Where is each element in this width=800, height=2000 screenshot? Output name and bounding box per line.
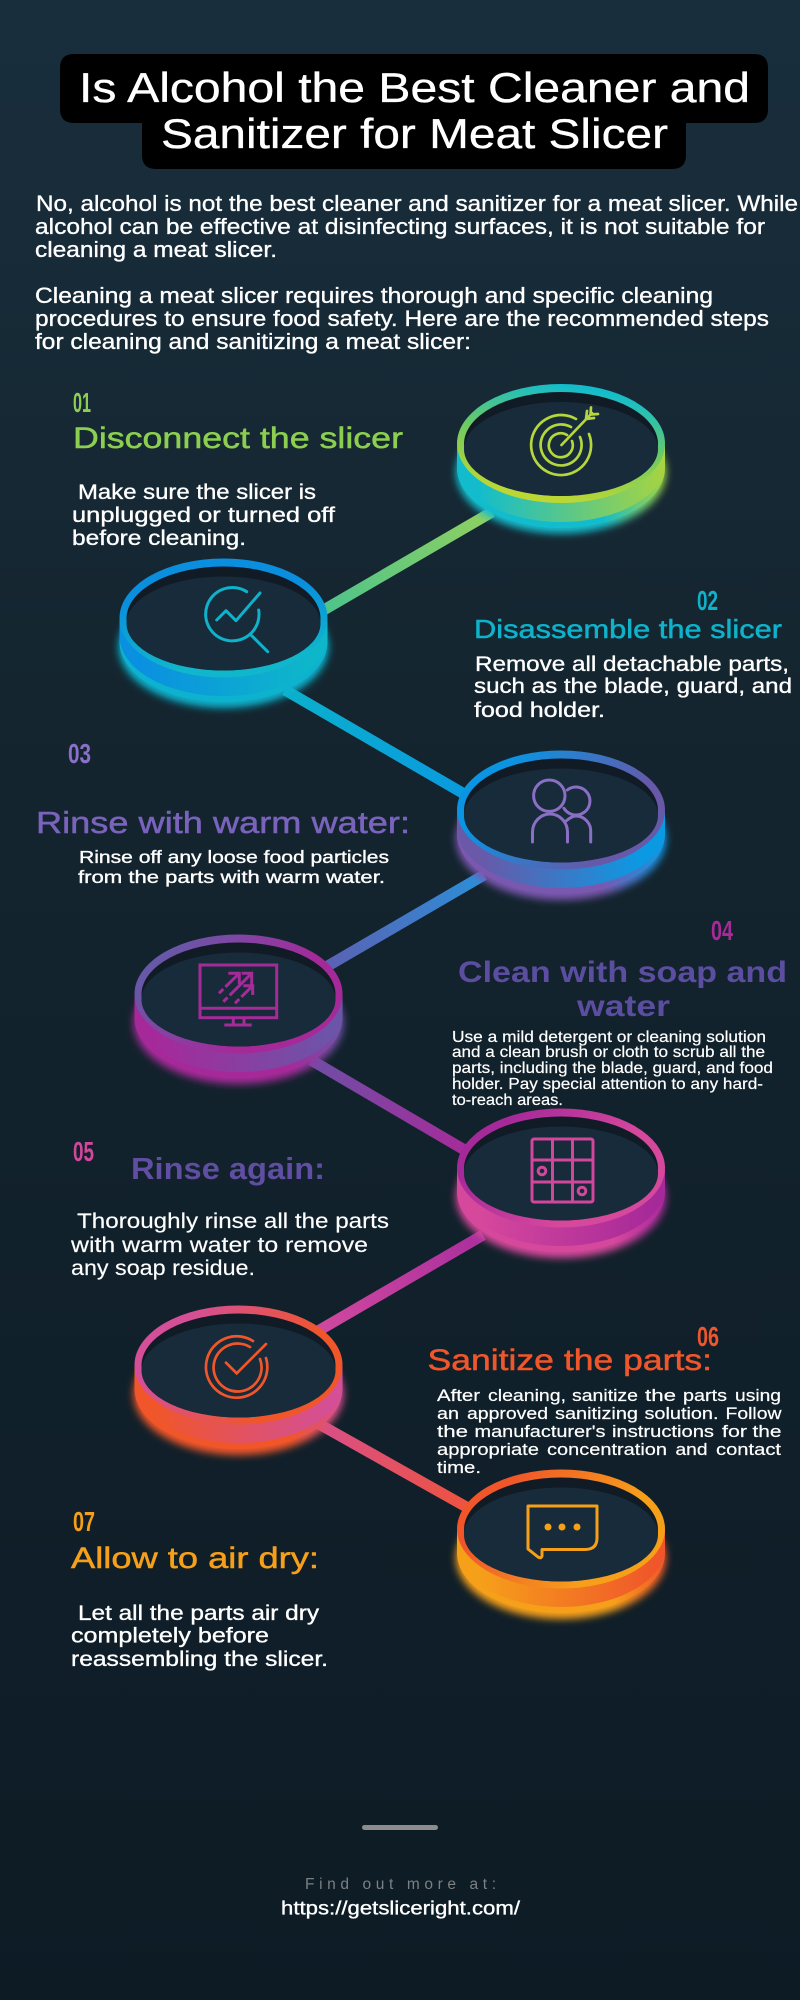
step 07 text: 07 xyxy=(73,1506,95,1537)
second paragraph: for cleaning and sanitizing a meat slicer: xyxy=(35,329,471,354)
step 05 text: Rinse again: xyxy=(131,1151,325,1186)
step 06 text: After xyxy=(437,1387,481,1405)
disc 2: magnifier xyxy=(118,558,328,708)
step 07 text: completely before xyxy=(71,1624,269,1648)
step 05 text: Thoroughly rinse all the parts xyxy=(77,1210,389,1233)
connector 1 to 2 xyxy=(322,512,492,611)
step 07 text: Allow to air dry: xyxy=(71,1542,319,1575)
step 06 text: cleaning, xyxy=(488,1387,566,1405)
step 03 text: from the parts with warm water. xyxy=(78,867,385,887)
connector 4 to 5 xyxy=(311,1060,468,1152)
step 01 text: before cleaning. xyxy=(72,527,246,550)
disc 4: monitor xyxy=(134,934,344,1084)
icon: target xyxy=(531,408,598,475)
step 03 text xyxy=(36,738,410,887)
step 01 text: 01 xyxy=(73,387,91,418)
footer: find out more xyxy=(281,1876,521,1920)
step 02 text: food holder. xyxy=(474,699,605,722)
footer: find out more: https://getsliceright.com/ xyxy=(281,1898,521,1920)
icon: monitor with arrows xyxy=(200,965,277,1025)
connector 2 to 3 xyxy=(285,690,466,795)
step 04 text: holder. Pay special attention to any hard- xyxy=(452,1076,763,1093)
step 04 text: Use a mild detergent or cleaning solution xyxy=(452,1029,766,1046)
step 06 text: instructions xyxy=(612,1423,714,1441)
step 06 text: the xyxy=(437,1423,468,1441)
step 02 text: 02 xyxy=(697,585,718,616)
step 06 text: manufacturer's xyxy=(474,1423,606,1441)
intro paragraph: cleaning a meat slicer. xyxy=(35,237,277,262)
step 05 text: 05 xyxy=(73,1136,94,1167)
connector 6 to 7 xyxy=(319,1424,470,1509)
step 06 text: Sanitize the parts: xyxy=(428,1344,712,1377)
step 05 text: any soap residue. xyxy=(71,1257,255,1280)
step 06 text: 06 xyxy=(697,1321,719,1352)
disc 3: people xyxy=(456,750,666,900)
disc 1: target xyxy=(456,384,666,534)
step 06 text: sanitize xyxy=(572,1387,638,1405)
step 04 text: 04 xyxy=(711,915,733,946)
step 06 text: and xyxy=(676,1441,708,1459)
step 06 text: sanitizing xyxy=(555,1405,638,1423)
step 07 text: reassembling the slicer. xyxy=(71,1648,328,1671)
step 01 text: Make sure the slicer is xyxy=(78,481,316,504)
step 05 text: with warm water to remove xyxy=(70,1234,368,1257)
icon: chat bubble xyxy=(528,1506,597,1558)
step 04 text: and a clean brush or cloth to scrub all the xyxy=(452,1044,765,1061)
title: Sanitizer for Meat Slicer xyxy=(161,110,668,157)
step 03 text: Rinse off any loose food particles xyxy=(79,847,389,867)
step 01 text xyxy=(72,387,403,550)
icon: people xyxy=(532,780,591,842)
step 01 text: Disconnect the slicer xyxy=(73,422,403,455)
second paragraph: Cleaning a meat slicer requires thorough and specific cleaning xyxy=(35,283,713,308)
title: Is Alcohol the Best Cleaner and xyxy=(79,64,750,111)
second paragraph: procedures to ensure food safety. Here are the recommended steps xyxy=(35,306,769,331)
step 06 text: an xyxy=(437,1405,459,1423)
connector 5 to 6 xyxy=(318,1235,483,1331)
step 04 text: Clean with soap and xyxy=(458,956,787,989)
step 02 text: Disassemble the slicer xyxy=(474,614,782,644)
intro paragraph: alcohol can be effective at disinfecting surfaces, it is not suitable for xyxy=(35,214,766,239)
step 02 text: such as the blade, guard, and xyxy=(474,675,792,698)
step 04 text: to-reach areas. xyxy=(452,1092,563,1109)
step 06 text: contact xyxy=(716,1441,782,1459)
intro paragraph xyxy=(35,191,798,262)
step 06 text: concentration xyxy=(547,1441,667,1459)
step 06 text: solution. xyxy=(644,1405,718,1423)
step 06 text: the xyxy=(645,1387,676,1405)
step 04 text: parts, including the blade, guard, and food xyxy=(452,1060,773,1077)
step 06 text: using xyxy=(735,1387,781,1405)
step 06 text: appropriate xyxy=(437,1441,539,1459)
step 06 text: time. xyxy=(437,1459,481,1477)
step 06 text: for xyxy=(722,1423,748,1441)
connector 3 to 4 xyxy=(326,875,484,967)
disc 6: check xyxy=(134,1306,344,1455)
step 06 text: approved xyxy=(467,1405,548,1423)
step 07 text xyxy=(71,1506,328,1671)
icon: check in circle xyxy=(206,1336,267,1398)
intro paragraph: No, alcohol is not the best cleaner and sanitizer for a meat slicer. While xyxy=(36,191,798,216)
step 06 text: the xyxy=(752,1423,782,1441)
disc 7: chat xyxy=(456,1470,666,1619)
step 06 text: parts xyxy=(683,1387,727,1405)
step 04 text xyxy=(452,915,787,1109)
icon: magnifier chart xyxy=(206,588,268,652)
step 04 text: water xyxy=(576,990,670,1023)
step 02 text: Remove all detachable parts, xyxy=(475,653,789,676)
step 03 text: 03 xyxy=(68,738,91,769)
step 01 text: unplugged or turned off xyxy=(72,504,335,527)
step 07 text: Let all the parts air dry xyxy=(78,1602,320,1625)
icon: calendar grid xyxy=(532,1139,593,1202)
footer divider xyxy=(362,1825,438,1830)
step 05 text xyxy=(70,1136,389,1280)
disc 5: grid xyxy=(456,1108,666,1258)
footer: find out more: Find out more at: xyxy=(305,1876,496,1893)
step 06 text: Follow xyxy=(726,1405,782,1423)
step 03 text: Rinse with warm water: xyxy=(36,805,410,840)
second paragraph xyxy=(35,283,769,354)
step 06 text xyxy=(428,1321,782,1477)
title xyxy=(60,54,768,169)
step 02 text xyxy=(474,585,792,722)
